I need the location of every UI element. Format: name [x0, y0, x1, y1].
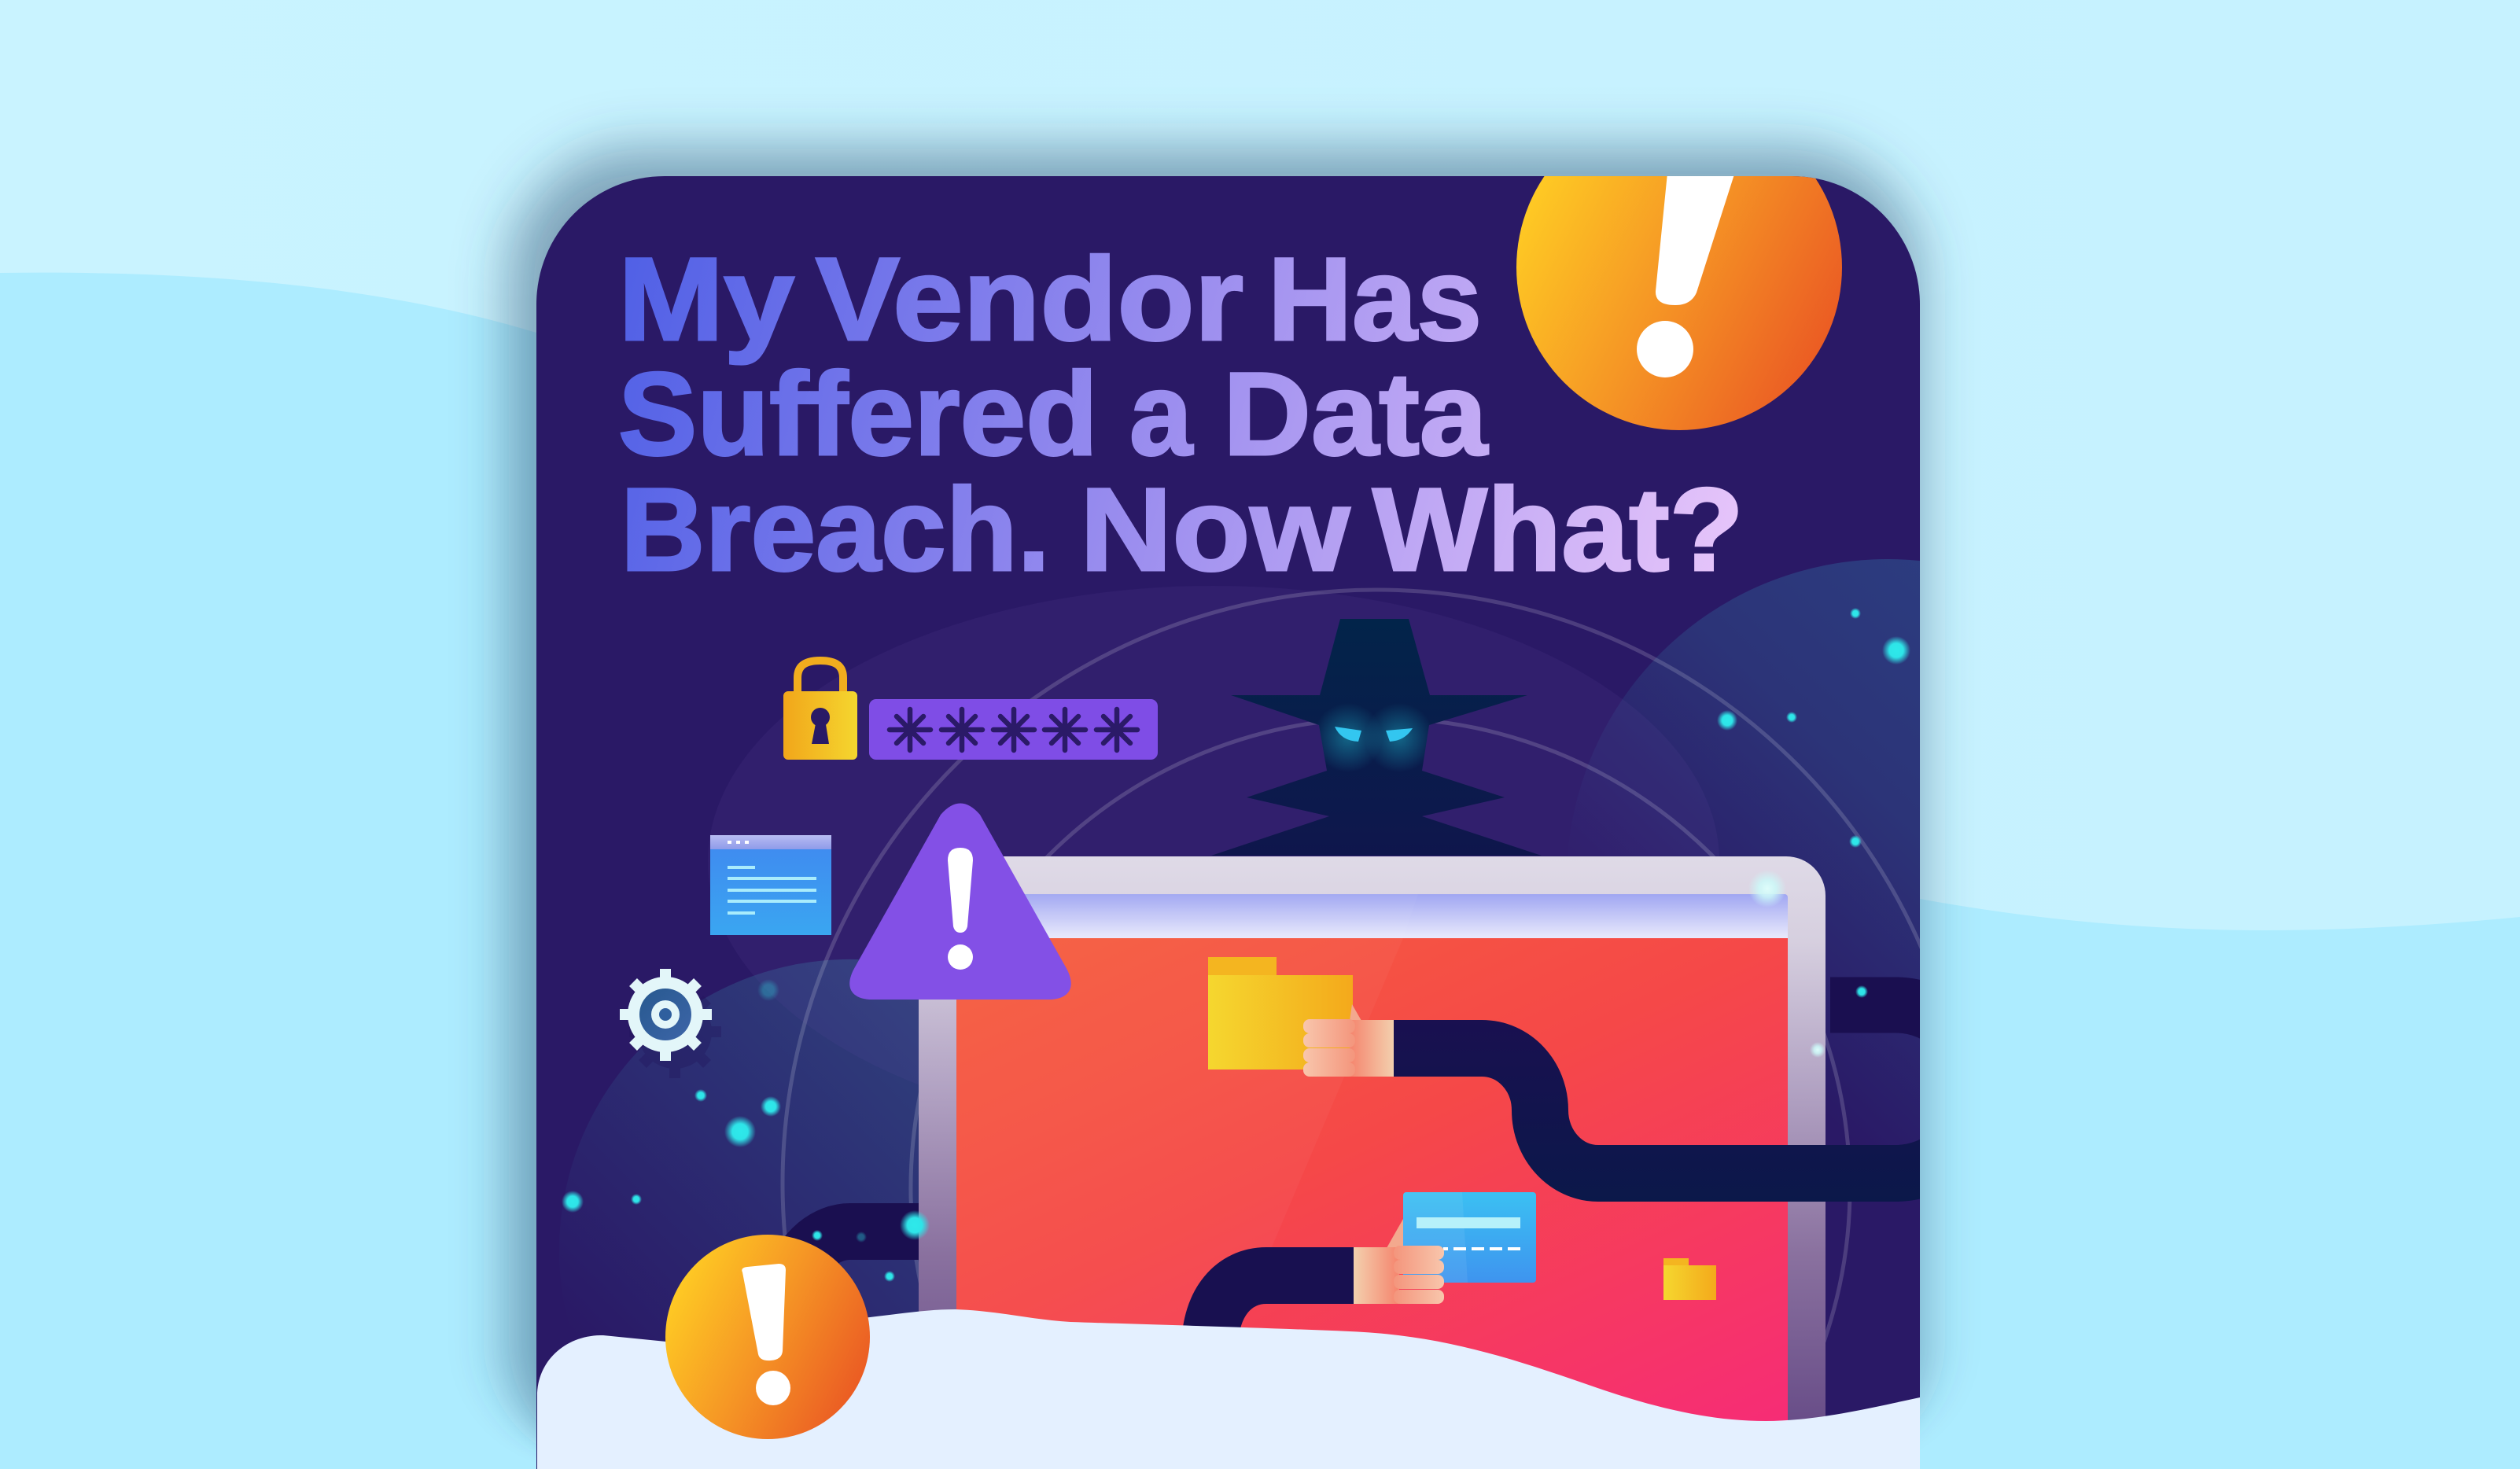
gear shadow: [629, 986, 721, 1078]
hacker eyes: [1335, 727, 1413, 742]
background circle: right: [1590, 559, 1920, 1096]
arm reaching for credit card: [1210, 1276, 1354, 1349]
title: [618, 233, 1744, 595]
icon: large folder: [1208, 957, 1353, 1070]
arm reaching for folder: [1394, 1048, 1980, 1173]
radar arcs: [780, 588, 1920, 1343]
monitor frame: [919, 856, 1826, 1469]
password asterisks: [890, 709, 1137, 750]
monitor header bar: [956, 894, 1788, 938]
card base: [536, 176, 1920, 1469]
screen reflection: [956, 894, 1418, 1353]
title line 2: Suffered: [618, 348, 1098, 480]
icon: credit card: [1403, 1192, 1536, 1283]
arm pipe behind monitor, left: [793, 1232, 919, 1282]
card shadow: [509, 149, 1920, 1469]
alert exclamation mark: [742, 1264, 786, 1360]
arm pipe behind monitor, right: [1830, 977, 1920, 1038]
icon: small folder: [1663, 1258, 1716, 1300]
background glow blob: [708, 586, 1719, 1136]
title line 3: Now: [1080, 463, 1350, 595]
title line 2: a: [1129, 348, 1193, 480]
panel: illustration card: [536, 176, 1920, 1469]
title line 1: My: [618, 233, 794, 365]
background circle: left: [568, 959, 919, 1317]
title line 1: Has: [1268, 233, 1482, 365]
hand holding credit card: [1354, 1219, 1444, 1304]
warning exclamation mark: [948, 848, 973, 933]
hand holding folder: [1303, 1004, 1394, 1077]
password field: [869, 699, 1158, 760]
title line 3: Breach.: [621, 463, 1050, 595]
foreground wave: [537, 1309, 1920, 1469]
icon: large alert circle: [1516, 105, 1842, 430]
title line 3: What?: [1372, 463, 1744, 595]
hacker silhouette: [1211, 619, 1542, 856]
icon: padlock: [783, 661, 857, 760]
icon: small alert circle: [665, 1235, 870, 1439]
icon: browser window: [710, 835, 831, 935]
monitor screen: [956, 938, 1788, 1469]
title line 3: [621, 463, 1744, 595]
title line 1: Vendor: [816, 233, 1243, 365]
monitor: [919, 856, 1826, 1469]
alert exclamation mark: [1656, 157, 1740, 305]
title line 1: [618, 233, 1482, 365]
icon: warning triangle: [849, 804, 1071, 1000]
title line 2: [618, 348, 1489, 480]
title line 2: Data: [1223, 348, 1489, 480]
icon: gear: [620, 969, 721, 1078]
glowing particles: [562, 608, 1910, 1282]
